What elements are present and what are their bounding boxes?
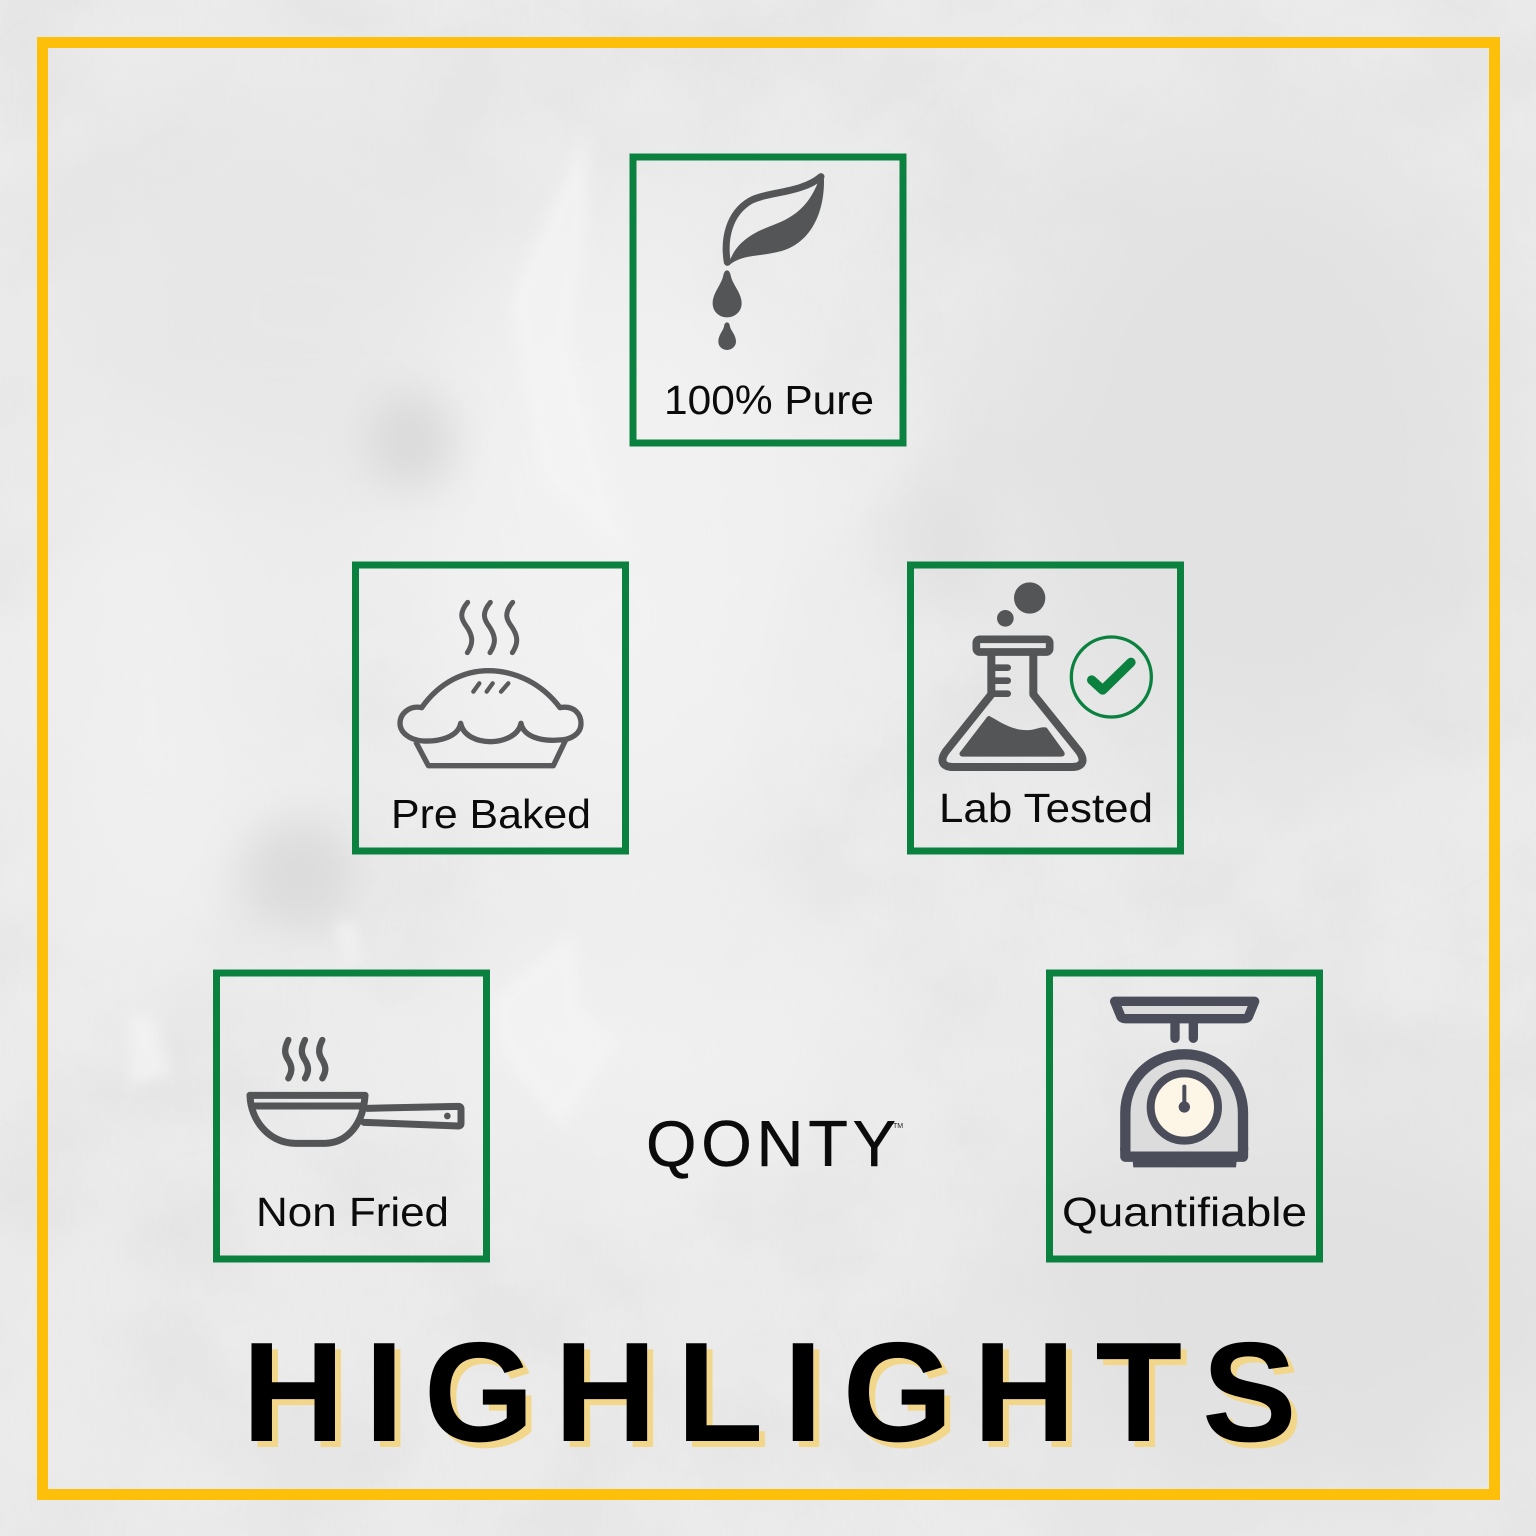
icon: kitchen scale xyxy=(1115,1001,1255,1167)
icon: steaming pie xyxy=(400,602,581,766)
panel: Quantifiable xyxy=(1050,973,1320,1259)
title: HIGHLIGHTS: HIGHLIGHTS xyxy=(248,1319,1323,1478)
title: HIGHLIGHTS: HIGHLIGHTS xyxy=(242,1313,1317,1472)
label: Quantifiable: Quantifiable xyxy=(1062,1189,1307,1235)
icon: leaf with droplets xyxy=(713,177,824,350)
label: Lab Tested: Lab Tested xyxy=(939,785,1153,831)
panel: Lab Tested xyxy=(910,565,1180,851)
logo: QONTY wordmark: QONTY xyxy=(646,1107,896,1180)
icon: green check badge xyxy=(1071,637,1151,717)
label: Pre Baked: Pre Baked xyxy=(391,791,591,837)
icon: flask with bubbles xyxy=(942,582,1083,767)
label: 100% Pure: 100% Pure xyxy=(664,377,874,423)
logo: QONTY wordmark: TM xyxy=(893,1123,903,1130)
icon: frying pan with steam xyxy=(250,1040,461,1143)
panel: 100% Pure xyxy=(633,157,903,443)
panel: Pre Baked xyxy=(356,565,626,851)
panel: Non Fried xyxy=(216,973,486,1259)
label: Non Fried: Non Fried xyxy=(256,1189,449,1235)
